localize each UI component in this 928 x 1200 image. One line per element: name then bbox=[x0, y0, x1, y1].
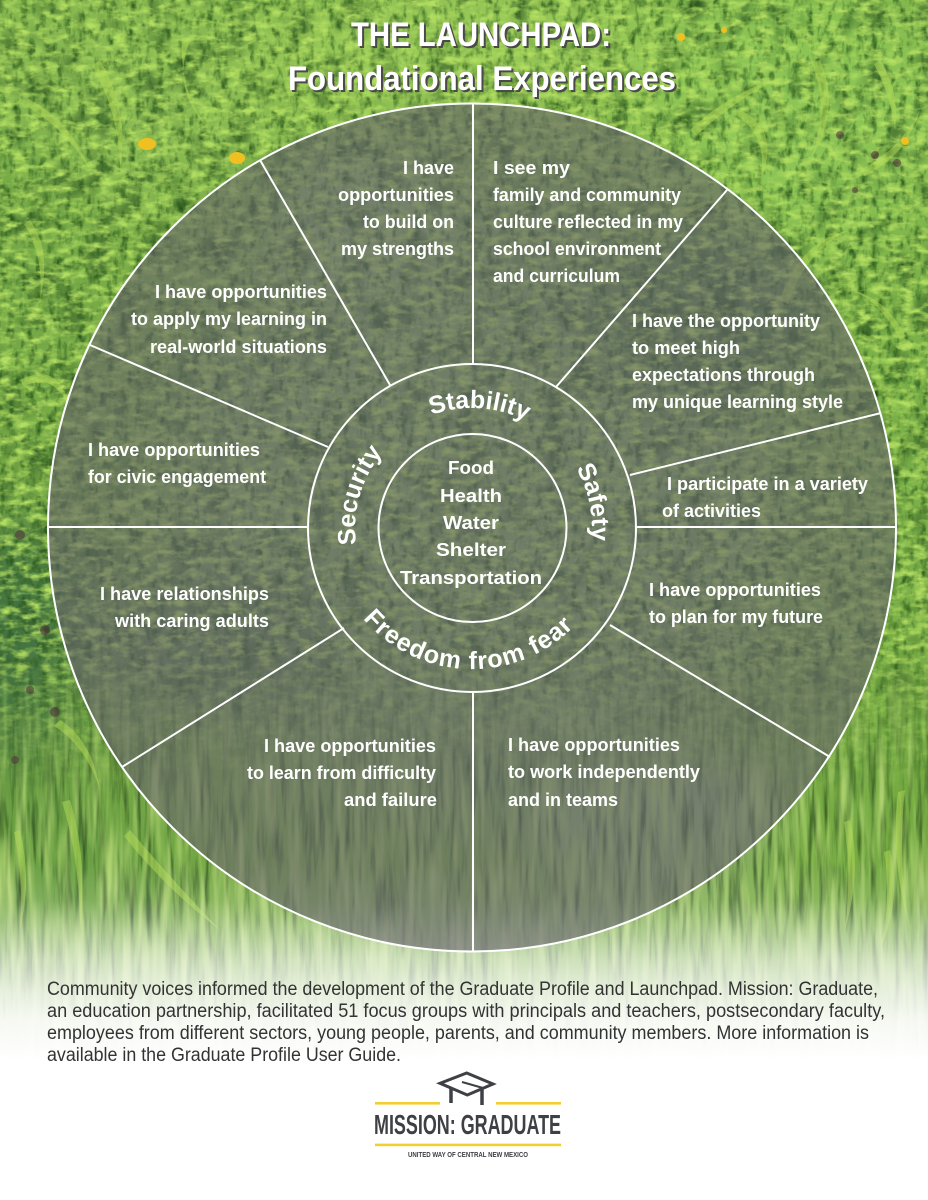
sector: activities: I participate in a variety bbox=[667, 473, 869, 494]
body text: community voices: an education partnership, facilitated 51 focus groups with principals and teachers, postsecondary faculty, bbox=[47, 1001, 885, 1022]
sector: culture: I see my bbox=[493, 157, 571, 178]
sector: strengths: opportunities bbox=[338, 184, 454, 205]
sector: future bbox=[649, 579, 823, 627]
sector: strengths: to build on bbox=[363, 211, 454, 232]
body text: community voices: available in the Graduate Profile User Guide. bbox=[47, 1045, 401, 1066]
sector: real-world learning: to apply my learning in bbox=[131, 308, 327, 329]
centre list: basic needs bbox=[400, 457, 542, 588]
body text: community voices bbox=[47, 979, 885, 1066]
body text: community voices: employees from different sectors, young people, parents, and community members. More information is bbox=[47, 1023, 869, 1044]
ring label: Safety: Safety bbox=[578, 463, 608, 541]
sector: independent and teams: I have opportunities bbox=[508, 734, 680, 755]
centre list: basic needs: Shelter bbox=[436, 539, 506, 560]
logo wordmark: MISSION: GRADUATE bbox=[374, 1109, 561, 1140]
sector: real-world learning: real-world situations bbox=[150, 336, 327, 357]
centre list: basic needs: Transportation bbox=[400, 567, 542, 588]
background: white fade at the bottom bbox=[0, 860, 928, 1200]
sector: real-world learning bbox=[131, 281, 327, 357]
logo rules bbox=[375, 1102, 561, 1146]
sector: activities bbox=[662, 473, 869, 521]
ring: outer foundation circle bbox=[308, 364, 636, 692]
logo: Mission Graduate bbox=[374, 1073, 561, 1159]
sector: caring adults: I have relationships bbox=[100, 583, 269, 604]
sector: caring adults: with caring adults bbox=[114, 610, 269, 631]
logo tagline: UNITED WAY OF CENTRAL NEW MEXICO bbox=[408, 1150, 528, 1159]
ring label: Security: Security bbox=[338, 444, 382, 544]
title bbox=[288, 16, 676, 98]
sector: civic engagement: for civic engagement bbox=[88, 466, 266, 487]
centre list: basic needs: Water bbox=[443, 512, 499, 533]
sector: real-world learning: I have opportunities bbox=[155, 281, 327, 302]
body text: community voices: Community voices informed the development of the Graduate Profile and Launchpad. Mission: Graduate, bbox=[47, 979, 878, 1000]
sector: independent and teams: to work independently bbox=[508, 761, 701, 782]
sector: difficulty and failure: to learn from difficulty bbox=[247, 762, 437, 783]
centre list: basic needs: Health bbox=[440, 485, 502, 506]
sector: high expectations: I have the opportunity bbox=[632, 310, 821, 331]
sector: civic engagement bbox=[88, 439, 266, 487]
sector: independent and teams: and in teams bbox=[508, 789, 618, 810]
sector: caring adults bbox=[100, 583, 269, 631]
sector: culture: school environment bbox=[493, 238, 661, 259]
sector: future: I have opportunities bbox=[649, 579, 821, 600]
sector: culture: and curriculum bbox=[493, 265, 620, 286]
sector: culture bbox=[493, 157, 684, 286]
centre list: basic needs: Food bbox=[448, 457, 494, 478]
sector: strengths: I have bbox=[403, 157, 454, 178]
sector: future: to plan for my future bbox=[649, 606, 823, 627]
sector: difficulty and failure bbox=[247, 735, 437, 810]
sector: high expectations: expectations through bbox=[632, 364, 815, 385]
wheel diagram bbox=[47, 102, 897, 952]
sector: culture: culture reflected in my bbox=[493, 211, 684, 232]
sector: strengths bbox=[338, 157, 454, 259]
sector: difficulty and failure: and failure bbox=[344, 789, 437, 810]
sector: culture: family and community bbox=[493, 184, 682, 205]
ring label: Stability: Stability bbox=[429, 390, 531, 422]
sector: high expectations bbox=[632, 310, 843, 412]
title: THE LAUNCHPAD: bbox=[351, 16, 611, 54]
sector: high expectations: my unique learning style bbox=[632, 391, 843, 412]
ring label: Freedom from fear: Freedom from fear bbox=[364, 608, 570, 670]
title: Foundational Experiences bbox=[288, 60, 676, 98]
sector: civic engagement: I have opportunities bbox=[88, 439, 260, 460]
ring: inner needs circle bbox=[378, 434, 566, 622]
sector: independent and teams bbox=[508, 734, 701, 810]
icon: graduation cap bbox=[440, 1073, 493, 1105]
sector: activities: of activities bbox=[662, 500, 761, 521]
sector: strengths: my strengths bbox=[341, 238, 454, 259]
sector: difficulty and failure: I have opportunities bbox=[264, 735, 436, 756]
sector: high expectations: to meet high bbox=[632, 337, 740, 358]
